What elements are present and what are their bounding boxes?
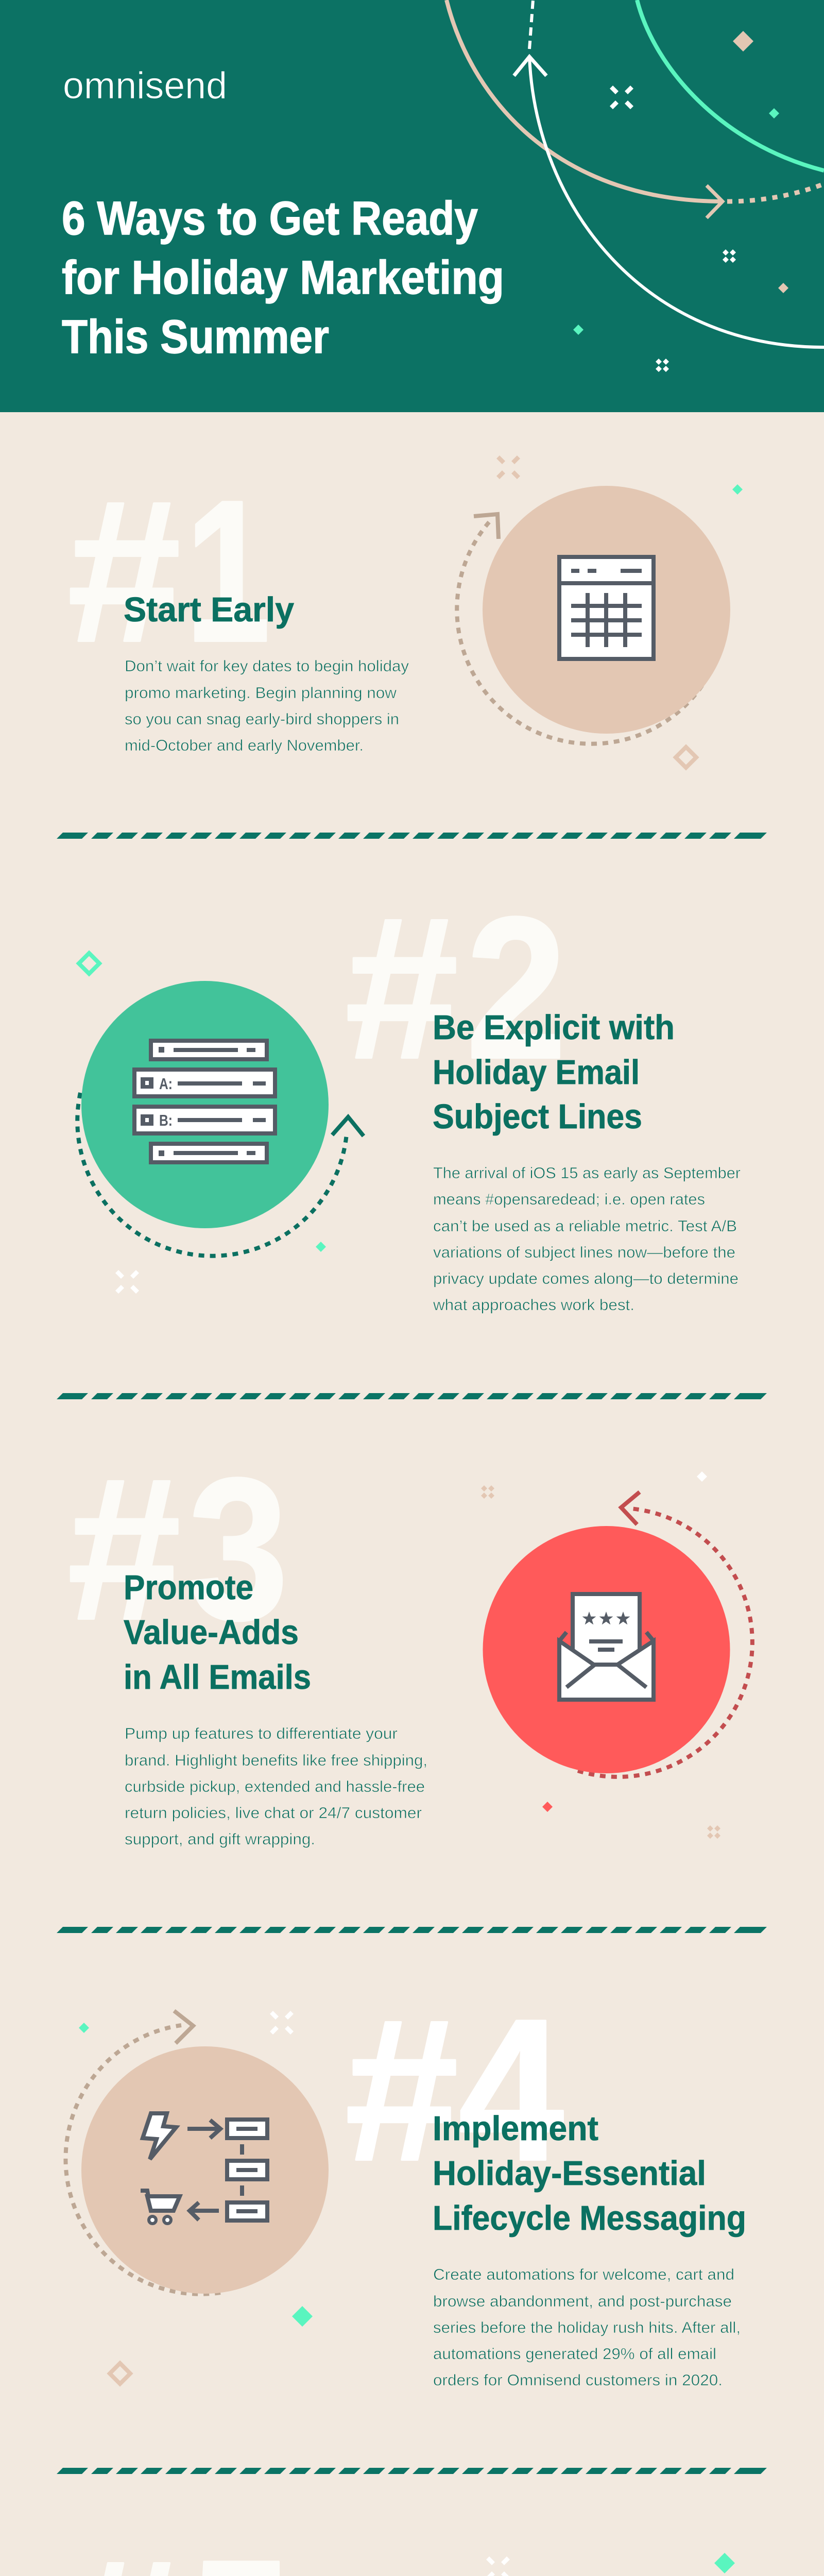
heading: Subject Lines	[433, 1097, 642, 1136]
number: #1	[67, 459, 270, 684]
icon: mint diamond	[769, 108, 779, 118]
decorative curve: mint	[637, 0, 824, 171]
icon: white dots lower	[656, 359, 669, 372]
body text: what approaches work best.	[433, 1296, 634, 1314]
arrow: dashed circular arrow	[77, 1093, 364, 1256]
heading: Lifecycle Messaging	[433, 2199, 746, 2238]
title: for Holiday Marketing	[62, 251, 504, 304]
icon: envelope with letter	[559, 1594, 654, 1700]
heading: Be Explicit with	[433, 1008, 675, 1047]
arrow: dashed circular arrow	[65, 2011, 220, 2294]
body text: curbside pickup, extended and hassle-free	[125, 1777, 425, 1795]
body text: support, and gift wrapping.	[125, 1830, 315, 1848]
body text: promo marketing. Begin planning now	[125, 684, 397, 702]
icon: white cross sparkle	[610, 86, 633, 109]
icon: hollow beige diamond	[110, 2363, 130, 2384]
icon: beige diamond	[733, 31, 753, 52]
title: This Summer	[62, 311, 329, 363]
icon: calendar	[559, 557, 654, 659]
number: #2: #	[345, 875, 458, 1101]
icon: mint diamond	[79, 2023, 89, 2033]
panel: header banner	[0, 0, 824, 412]
body text: return policies, live chat or 24/7 customer	[125, 1804, 422, 1822]
body text: variations of subject lines now—before the	[433, 1243, 735, 1261]
icon: A/B subject lines: A:	[159, 1075, 173, 1093]
icon: large mint diamond	[714, 2553, 735, 2573]
body text: can’t be used as a reliable metric. Test A/B	[433, 1217, 737, 1235]
heading: Holiday-Essential	[433, 2154, 706, 2193]
body text: orders for Omnisend customers in 2020.	[433, 2371, 723, 2389]
icon: white cross sparkle	[486, 2556, 510, 2576]
number: #3	[67, 1436, 288, 1662]
body text: browse abandonment, and post-purchase	[433, 2292, 732, 2310]
icon: mint diamond	[316, 1242, 326, 1252]
icon: white diamond	[697, 1471, 707, 1482]
panel: tip 1 start early	[67, 455, 743, 768]
arrow: white curve with dashed tail	[514, 0, 824, 347]
number: #1: #	[67, 459, 181, 684]
logo: omnisend: omnisend	[63, 65, 227, 107]
body text	[125, 1724, 427, 1848]
title	[62, 192, 504, 363]
number: #3: #	[67, 1436, 181, 1662]
body text: The arrival of iOS 15 as early as September	[433, 1164, 741, 1182]
body text	[433, 2265, 741, 2389]
icon: white cross sparkle	[115, 1270, 139, 1294]
body text	[433, 1164, 741, 1314]
icon: red diamond	[542, 1802, 553, 1812]
heading	[433, 1008, 675, 1136]
title: 6 Ways to Get Ready	[62, 192, 478, 245]
icon: beige cross sparkle	[496, 455, 520, 479]
heading: in All Emails	[124, 1658, 311, 1697]
icon: A/B subject lines	[134, 1041, 275, 1162]
heading: Promote	[124, 1568, 253, 1607]
panel: tip 3 value-adds	[67, 1436, 752, 1848]
heading	[433, 2109, 746, 2238]
heading: Value-Adds	[124, 1613, 299, 1652]
body text: mid-October and early November.	[125, 736, 364, 754]
body text: series before the holiday rush hits. After all,	[433, 2318, 741, 2336]
arrow: dashed circular arrow	[457, 514, 708, 744]
body text: Create automations for welcome, cart and	[433, 2265, 734, 2283]
icon: white dots	[723, 249, 736, 263]
body text: so you can snag early-bird shoppers in	[125, 710, 399, 728]
heading: Start Early	[124, 590, 294, 629]
arrow: dashed circular arrow	[578, 1492, 752, 1777]
body text	[125, 657, 409, 754]
heading: Implement	[433, 2109, 598, 2148]
body text: Don’t wait for key dates to begin holiday	[125, 657, 409, 675]
icon: A/B subject lines: B:	[159, 1111, 173, 1129]
icon: large mint diamond	[292, 2306, 313, 2327]
icon: hollow mint diamond	[79, 953, 99, 974]
icon: hollow beige diamond	[676, 747, 696, 768]
number: #2: 2	[466, 875, 566, 1101]
number: #5	[67, 2518, 291, 2576]
number: #3: 3	[188, 1436, 288, 1662]
panel: tip 5 SMS and push	[67, 2518, 735, 2576]
circle backdrop	[81, 981, 329, 1228]
icon: white cross sparkle	[270, 2011, 294, 2035]
panel: tip 2 explicit subject lines	[77, 875, 741, 1314]
body text: brand. Highlight benefits like free shipping,	[125, 1751, 427, 1769]
icon: beige dots lower	[707, 1825, 720, 1839]
icon: beige dots	[481, 1485, 494, 1499]
number: #2	[345, 875, 566, 1101]
heading: Holiday Email	[433, 1053, 640, 1092]
icon: mint diamond	[732, 484, 743, 495]
body text: means #opensaredead; i.e. open rates	[433, 1190, 705, 1208]
number: #4: 4	[458, 1977, 565, 2203]
body text: privacy update comes along—to determine	[433, 1269, 739, 1287]
body text: automations generated 29% of all email	[433, 2345, 716, 2363]
icon: automation flow	[141, 2113, 267, 2224]
heading	[124, 1568, 311, 1697]
circle backdrop	[483, 1526, 730, 1773]
panel: tip 4 lifecycle messaging	[65, 1977, 746, 2389]
number: #4: #	[345, 1977, 458, 2203]
icon: mint small diamond	[573, 325, 583, 335]
number: #1: 1	[185, 459, 270, 684]
number: #4	[345, 1977, 565, 2203]
icon: beige small diamond	[778, 283, 788, 293]
circle backdrop	[483, 486, 730, 734]
body text: Pump up features to differentiate your	[125, 1724, 398, 1742]
circle backdrop	[81, 2046, 329, 2294]
arrow: beige curve with dotted tail	[447, 0, 824, 218]
